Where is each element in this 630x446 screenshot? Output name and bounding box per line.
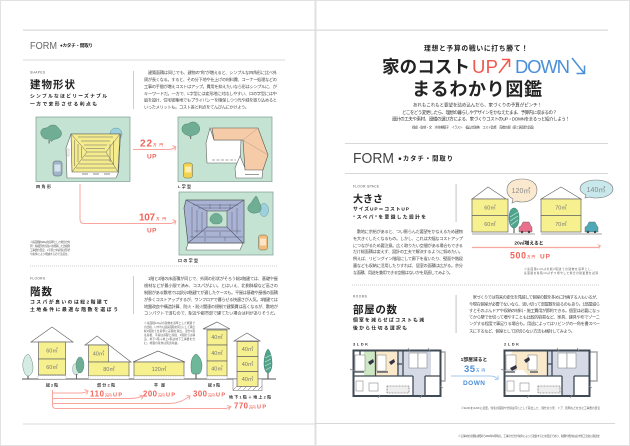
arrows and cost differences by floors: UP <box>257 404 266 410</box>
text block: shapes: いったメリットも。コスト差と利点をてんびんにかけよう。 <box>144 104 249 110</box>
house: basement plus two storeys: 40㎡ <box>242 375 254 383</box>
text block: rooms <box>469 294 600 334</box>
heading: shapes: 建物形状 <box>30 78 76 91</box>
text block: floor space <box>353 228 464 276</box>
illustration: courtyard house plot <box>179 192 273 255</box>
arrow: square to courtyard, 107 UP: 万円 <box>156 217 166 221</box>
arrows and cost differences by floors: 万円 <box>249 406 256 410</box>
arrow: 20 sqm larger, 500 UP: UP <box>540 254 551 260</box>
illustration: floor space comparison <box>472 179 613 234</box>
left page section header <box>30 41 93 52</box>
house: partial two-storey 40+80: 80㎡ <box>103 365 115 373</box>
text block: floors: 制限がある敷地では部分2階建てが適したケースも。平屋は基礎や屋根の面積 <box>144 289 279 296</box>
label: 2LDK: 2LDK <box>504 342 519 346</box>
lead text: 構成・取材・文 木村美穂子 イラスト 福山佳津美 コスト監修 高橋功樹（家と居設計企画） <box>412 124 536 129</box>
arrow: square to L-shape, 22 UP: 万円 <box>153 143 163 147</box>
title block <box>382 44 584 100</box>
car: pink <box>519 222 532 233</box>
arrow: square to L-shape, 22 UP <box>133 138 176 160</box>
label: courtyard shape: ロの字型 <box>178 257 198 263</box>
floor plan: 2LDK <box>501 348 597 398</box>
heading: rooms <box>353 294 424 332</box>
text block: shapes: 工事の手間が増えコストはアップ。費用を抑えたいなら形はシンプルに、が <box>144 83 278 90</box>
heading: rooms: 部屋の数 <box>353 303 398 316</box>
house: 140 sqm: 70㎡ <box>555 220 567 228</box>
heading: floors: 土地条件に最適な階数を選ぼう <box>30 306 118 313</box>
text block: floor space: につながるため要注意。広く取りたい空間がある場合もできる <box>353 242 463 249</box>
text block: floors: 地盤改良や構造計算、防火・耐火関連の規制で建築費は高くなるが、敷地が <box>144 303 279 310</box>
text block: floor space: 裏なども収納に活用したりすれば、居室の面積は広がる。余分 <box>353 262 464 269</box>
labels: floor types: 平屋 <box>154 382 165 388</box>
arrow: 20 sqm larger, 500 UP: 500 <box>510 250 526 260</box>
labels: floor types: 地下1階＋地上2階 <box>229 394 271 400</box>
text block: floors: 1階と2階の床面積が同じで、外周の形状がそろう総2階建ては、基礎や屋 <box>144 275 278 282</box>
house: three-storey 40x3 <box>203 322 230 379</box>
house: 140 sqm: 70㎡ <box>555 204 567 212</box>
car: blue <box>585 222 598 233</box>
heading: floor space: 大きさ <box>353 192 383 206</box>
arrows and cost differences by floors: 万円 <box>158 394 164 398</box>
title block: 家のコスト <box>382 57 470 77</box>
right page section header: FORM <box>353 151 394 167</box>
arrows and cost differences by floors: 110 <box>90 390 105 398</box>
heading: rooms: 個室を減らせばコストも減 <box>353 317 424 324</box>
lead text: どこをどう変更したら、理想の暮らしやデザインをかなえたまま、予算内に収まるの？ <box>402 109 557 116</box>
heading: floors <box>30 276 118 313</box>
house: basement plus two storeys: 40㎡ <box>242 360 254 368</box>
footnote: floor space: 床面積を各階10㎡ずつ増やした場合の建築費を試算 <box>524 271 598 275</box>
arrow: 20 sqm larger, 500 UP: 20㎡増えると <box>514 240 544 246</box>
arrows and cost differences by floors: 300 <box>193 390 208 398</box>
illustration: L-shaped house plot <box>178 117 272 182</box>
text block: floor space: だけ総面積は変えず、設計の工夫で解決するように努めたい。 <box>353 248 463 255</box>
lead text: 設計の工夫や素材、設備の選び方による、家づくりコストのUP・DOWNをまるっと紹介しよう！ <box>392 116 570 123</box>
labels: floor types <box>46 382 271 400</box>
arrow: square to courtyard, 107 UP: UP <box>147 228 157 234</box>
footnote: floors <box>144 321 195 345</box>
arrow: one less room, 35 DOWN: DOWN <box>463 380 485 387</box>
arrow: 20 sqm larger, 500 UP: 万円 <box>527 255 536 259</box>
footnote: floors: 造、地下1階＋地上2階は地下工事費を含 <box>144 337 195 341</box>
heading: rooms: 後から仕切る選択も <box>353 325 407 332</box>
house: 120 sqm: 60㎡ <box>484 220 496 228</box>
footnote: shapes: ※床面積約125㎡を基準とした場合の外 <box>30 240 70 244</box>
heading: floors: 階数 <box>30 285 52 298</box>
labels: floor types: 部分2階 <box>97 382 115 388</box>
arrow: square to courtyard, 107 UP: 107 <box>139 212 155 224</box>
footnote: floors: の比較。いずれも延床面積を同じにして算出 <box>144 325 195 329</box>
left page section header: ●カタチ・間取り <box>60 42 93 49</box>
text block: rooms: 今現在個室が必要でないなら、思い切って部屋数を絞るのもあり。1部屋減ら <box>469 300 600 308</box>
footnote: floors: ※床面積120㎡の建物を基準とした概算で <box>144 321 195 325</box>
house: partial two-storey 40+80 <box>85 336 131 379</box>
floor plan: 3LDK <box>350 348 445 398</box>
heading: rooms: ROOMS <box>353 294 367 298</box>
labels: floor types: 総3階 <box>208 382 220 388</box>
text block: floor space: 例えば、リビングイン階段にして廊下を省いたり、壁面や階段 <box>353 255 464 262</box>
footnote: page bottom: ※ 記事内の金額は概算で2024年9月時点。工事の方法や条件によって変動するため目安であり、総額や費用は必ず施工会社に確認を <box>458 434 600 438</box>
footnote: shapes: 周・屋根形状の違いを概算した比較例 <box>30 244 70 248</box>
house: two-storey 60+60: 60㎡ <box>46 346 58 354</box>
arrows and cost differences by floors <box>52 390 266 410</box>
house: two-storey 60+60 <box>31 327 73 379</box>
text block: rooms: ングする程度で事足りる場合も。用途によってはリビングの一角を書スペー <box>469 320 600 327</box>
arrow: square to courtyard, 107 UP <box>80 184 176 234</box>
arrows and cost differences by floors: UP <box>216 392 225 398</box>
footnote: shapes: 工事費の目安。L字型と中庭型は形状 <box>30 248 70 252</box>
text block: floor space: を大きくしたくなるもの。しかし、これは大幅なコストアップ <box>353 235 464 242</box>
heading: floors: FLOORS <box>30 276 45 280</box>
speech bubble: 120 <box>507 179 537 203</box>
illustration: house comparison by floors <box>22 322 276 390</box>
speech bubble: 140 <box>580 180 613 198</box>
trees: paired <box>72 357 84 379</box>
arrows and cost differences by floors: 万円 <box>208 394 214 398</box>
text block: shapes: 建築面積は同じでも、建物の“角”が増えると、シンプルな四角形に比べ外 <box>144 69 278 76</box>
heading: shapes: SHAPES <box>30 70 45 74</box>
title block: UP <box>472 56 498 77</box>
speech bubble: 140: 140㎡ <box>587 186 605 194</box>
house: three-storey 40x3: 40㎡ <box>211 349 223 357</box>
text block: floors <box>144 275 279 316</box>
house: basement plus two storeys <box>233 333 262 390</box>
title block: 理想と予算の戦いに打ち勝て！ <box>424 44 528 52</box>
text block: shapes: キーワードだ。一方で、L字型には変形地に対応しやすい、ロの字型には中 <box>144 90 277 97</box>
arrows and cost differences by floors: 770 <box>234 402 249 410</box>
left page section header: FORM <box>30 41 57 52</box>
footnote: floor space <box>524 267 598 275</box>
tree <box>509 208 519 233</box>
right page section header <box>353 151 453 167</box>
heading: shapes: シンプルなほどリーズナブル <box>30 93 107 100</box>
text block: floor space: 敷地に余裕があると、つい膨らんだ要望をかなえるため建物 <box>353 228 463 235</box>
text block: floor space: な面積、用途を兼用できる空間はないかを見直してみよう。 <box>353 269 453 276</box>
house: 120 sqm <box>472 187 535 234</box>
arrows and cost differences by floors: 200 <box>143 390 158 398</box>
footnote: shapes: や条件により増減するので注意を。 <box>30 252 70 256</box>
text block: shapes: 庭を設け、住宅密集地でもプライバシーを確保しつつ光や緑を取り込めると <box>144 96 277 104</box>
arrow: one less room, 35 DOWN: 万円 <box>476 368 486 372</box>
house: 120 sqm: 60㎡ <box>484 204 496 212</box>
arrow: 20 sqm larger, 500 UP <box>472 240 600 260</box>
lead text: あれもこれもと要望を詰め込んだら、家づくりの予算がピンチ！ <box>413 102 542 109</box>
text block: floors: が多くコストアップするが、ワンフロアで暮らせる快適さが人気。3階建ては <box>144 296 278 303</box>
house: single-storey 120: 120㎡ <box>152 365 167 373</box>
label: L-shape: L字型 <box>178 183 191 189</box>
text block: shapes: 周が長くなる。すると、その分下地や仕上げの材料費、コーナー処理などの <box>144 76 277 83</box>
arrow: one less room, 35 DOWN: 1部屋減ると <box>461 356 488 363</box>
house: partial two-storey 40+80: 40㎡ <box>93 350 105 358</box>
speech bubble: 120: 120㎡ <box>512 187 530 195</box>
arrow: down <box>572 58 584 74</box>
arrow: square to L-shape, 22 UP: UP <box>147 154 157 160</box>
label: 3LDK: 3LDK <box>353 342 368 346</box>
footnote: shapes <box>30 240 70 256</box>
right page section header: ●カタチ・間取り <box>398 154 453 162</box>
heading: floors: コスパが良いのは総2階建て <box>30 298 108 306</box>
text block: rooms: スにするなど、個室として区切らない方法も検討してみよう。 <box>469 328 575 334</box>
heading: floor space: “スペパ”を意識した設計を <box>353 214 426 220</box>
arrows and cost differences by floors: UP <box>166 392 175 398</box>
house: three-storey 40x3: 40㎡ <box>211 333 223 341</box>
footnote: floors: む。地盤の条件は別途考慮。 <box>144 341 180 345</box>
arrow: square to L-shape, 22 UP: 22 <box>140 138 152 150</box>
arrows and cost differences by floors: 万円 <box>105 394 112 398</box>
footnote: floors: 総2階建てを基準に差額を算出。部分2階 <box>144 329 195 333</box>
arrows and cost differences by floors: UP <box>113 392 122 398</box>
footnote: floor space: ※床面積120㎡の総2階建ての建物を基準とし、 <box>524 267 594 271</box>
tree: pale striped <box>23 354 33 379</box>
house: two-storey 60+60: 60㎡ <box>46 363 58 371</box>
arrow: up <box>499 60 510 73</box>
illustration: square house plot <box>36 117 130 182</box>
tree: green <box>191 354 202 379</box>
arrow: one less room, 35 DOWN <box>451 356 498 387</box>
footnote: rooms: ※3LDKを2LDKに変更。住宅の面積や仕様は同じとして算出した、間仕切り壁、ドア、照明などを含む工事費の目安 <box>461 406 600 410</box>
arrow: one less room, 35 DOWN: 35 <box>464 364 476 375</box>
house: basement plus two storeys: 40㎡ <box>242 345 254 353</box>
label: square shape: 四角形 <box>36 183 51 189</box>
text block: rooms: 家づくりでは将来の変化を見越して個室の数を多めに計画する人もいるが、 <box>469 294 600 300</box>
title block: まるわかり図鑑 <box>412 80 542 100</box>
text block: shapes <box>144 69 278 110</box>
heading: shapes: 一方で変形させる利点も <box>30 101 97 108</box>
tree: striped teal <box>264 349 272 379</box>
house: 140 sqm <box>541 187 602 234</box>
labels: floor types: 総2階 <box>46 382 58 388</box>
house: three-storey 40x3: 40㎡ <box>211 364 223 372</box>
text block: rooms: てから壁で仕切って増やすことも比較的容易など、家具、建具や布でゾーニ <box>469 314 600 320</box>
heading: shapes <box>30 70 107 108</box>
lead text <box>392 102 570 129</box>
footnote: floors: は屋根、平屋は基礎と屋根、3階建ては構 <box>144 333 195 337</box>
heading: floor space: FLOOR SPACE <box>353 184 379 188</box>
title block: DOWN <box>515 56 570 77</box>
text block: floors: コンパクトで済むので、駅近や都市部で建てたい場合は利がありそうだ。 <box>144 310 278 316</box>
text block: rooms: すとそのぶんドアや収納の材料・施工費用が節約できる。個室は必要になっ <box>469 307 600 314</box>
heading: floor space: サイズUP＝コストUP <box>353 206 410 212</box>
text block: floors: 根材などが最小限で済み、コスパがよい。とはいえ、北側斜線など高さの <box>144 282 278 289</box>
house: single-storey 120 <box>133 351 185 379</box>
heading: floor space <box>353 184 426 220</box>
